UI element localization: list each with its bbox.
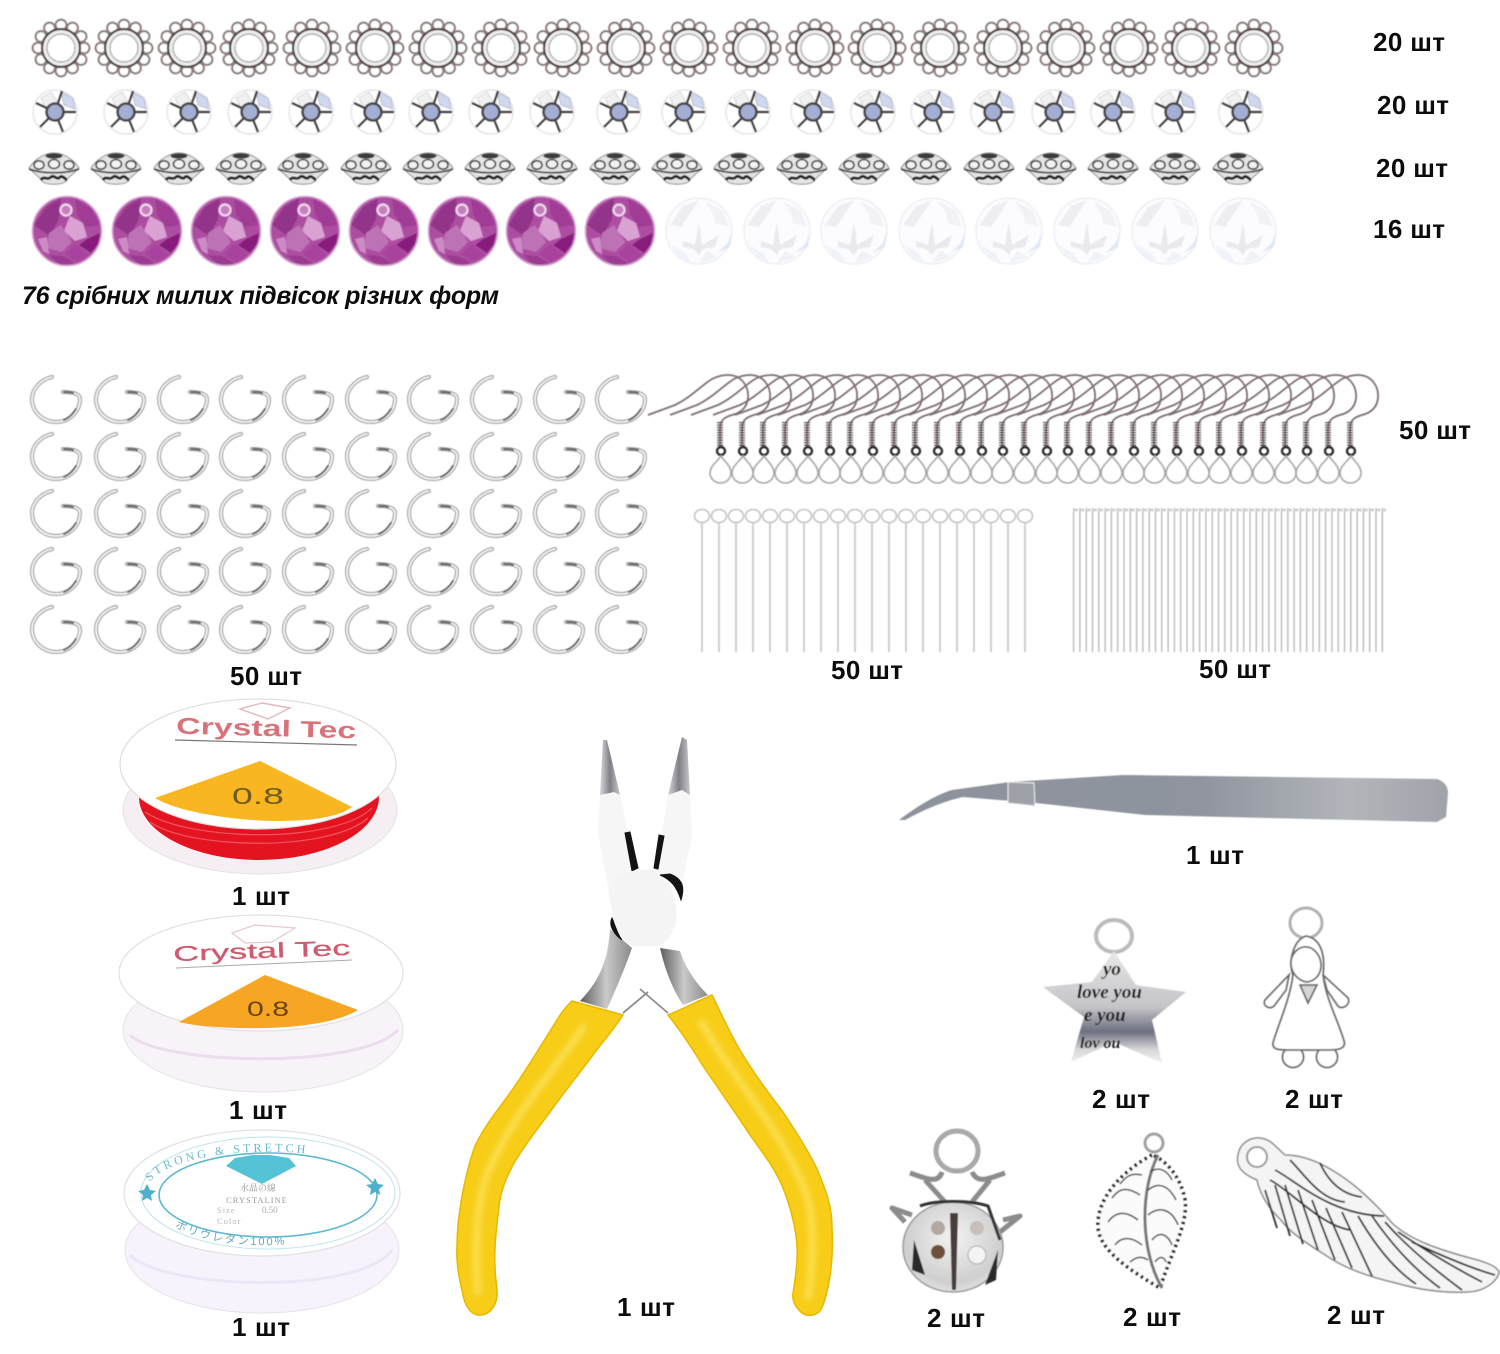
label: leaf quantity: 2 шт [1123,1302,1181,1332]
row: star-cap clear beads [33,90,1263,134]
charm: star: e you [1084,1005,1126,1026]
row: purple crystal beads [32,196,655,266]
charm: star: love you [1077,982,1142,1003]
heading: charms note: 76 срібних милих підвісок різних форм [22,282,499,310]
row: silver rondelle beads [29,153,1263,184]
spool: clear thread, orange label: 0.8 [247,998,289,1021]
pivot plate [608,869,676,946]
label: star quantity: 2 шт [1092,1084,1150,1114]
jump rings grid [32,377,645,652]
spring wire [623,989,668,1013]
spool: clear thread, blue label: 水晶の線 [240,1182,276,1193]
label: eye pins quantity: 50 шт [831,655,903,685]
spool: red thread: 0.8 [232,783,284,809]
right jaw [655,737,692,880]
spool: clear thread, blue label: 0.50 [262,1205,278,1215]
charm: star: lov ou [1080,1035,1121,1052]
panel: beads rows [29,20,1282,266]
earring hooks [648,375,1378,483]
label: girl quantity: 2 шт [1285,1084,1343,1114]
label: tweezers quantity: 1 шт [1186,840,1244,870]
steel arms [580,929,632,1009]
black jaw slots [611,832,683,940]
spool: clear thread, blue label: Color [217,1216,241,1226]
charm: wing [1237,1138,1499,1292]
charm: leaf [1098,1134,1185,1288]
charm: ladybug [892,1131,1020,1292]
spool: clear thread, orange label: Crystal Tec [173,937,351,966]
label: clear spool 2 quantity: 1 шт [232,1312,290,1342]
tweezers [899,775,1448,822]
spool: clear thread, blue label: CRYSTALINE [226,1195,288,1205]
label: row 4 quantity: 16 шт [1373,214,1445,244]
label: hooks quantity: 50 шт [1399,415,1471,445]
spool: red thread: Crystal Tec [176,713,357,743]
charm: star: yo [1101,959,1121,980]
spool: clear thread, blue label: STRONG & STRETCH [145,1144,306,1181]
row: clear crystal beads [666,198,1276,264]
eye pins [694,510,1032,652]
label: row 1 quantity: 20 шт [1373,27,1445,57]
label: row 2 quantity: 20 шт [1377,90,1449,120]
spool: clear thread, blue label: ポリウレタン100% [176,1222,284,1246]
head pins [1073,510,1386,580]
label: clear spool 1 quantity: 1 шт [229,1095,287,1125]
pliers [457,737,832,1315]
right grip [668,995,832,1315]
left grip [457,1001,623,1315]
spool: clear thread, orange label [119,915,403,1092]
label: red spool quantity: 1 шт [232,881,290,911]
label: row 3 quantity: 20 шт [1376,153,1448,183]
label: pliers quantity: 1 шт [617,1292,675,1322]
charm: star [1043,920,1186,1063]
grip highlights [476,1020,812,1300]
spool: clear thread, blue label: Size [217,1205,236,1215]
label: wing quantity: 2 шт [1327,1300,1385,1330]
left jaw [598,740,636,898]
label: ladybug quantity: 2 шт [927,1303,985,1333]
row: flower spacer beads [33,20,1282,76]
label: jump rings quantity: 50 шт [230,661,302,691]
charm: girl [1264,908,1349,1068]
label: head pins quantity: 50 шт [1199,654,1271,684]
spool: clear thread, blue label [124,1130,400,1314]
spool: red thread [120,699,397,874]
